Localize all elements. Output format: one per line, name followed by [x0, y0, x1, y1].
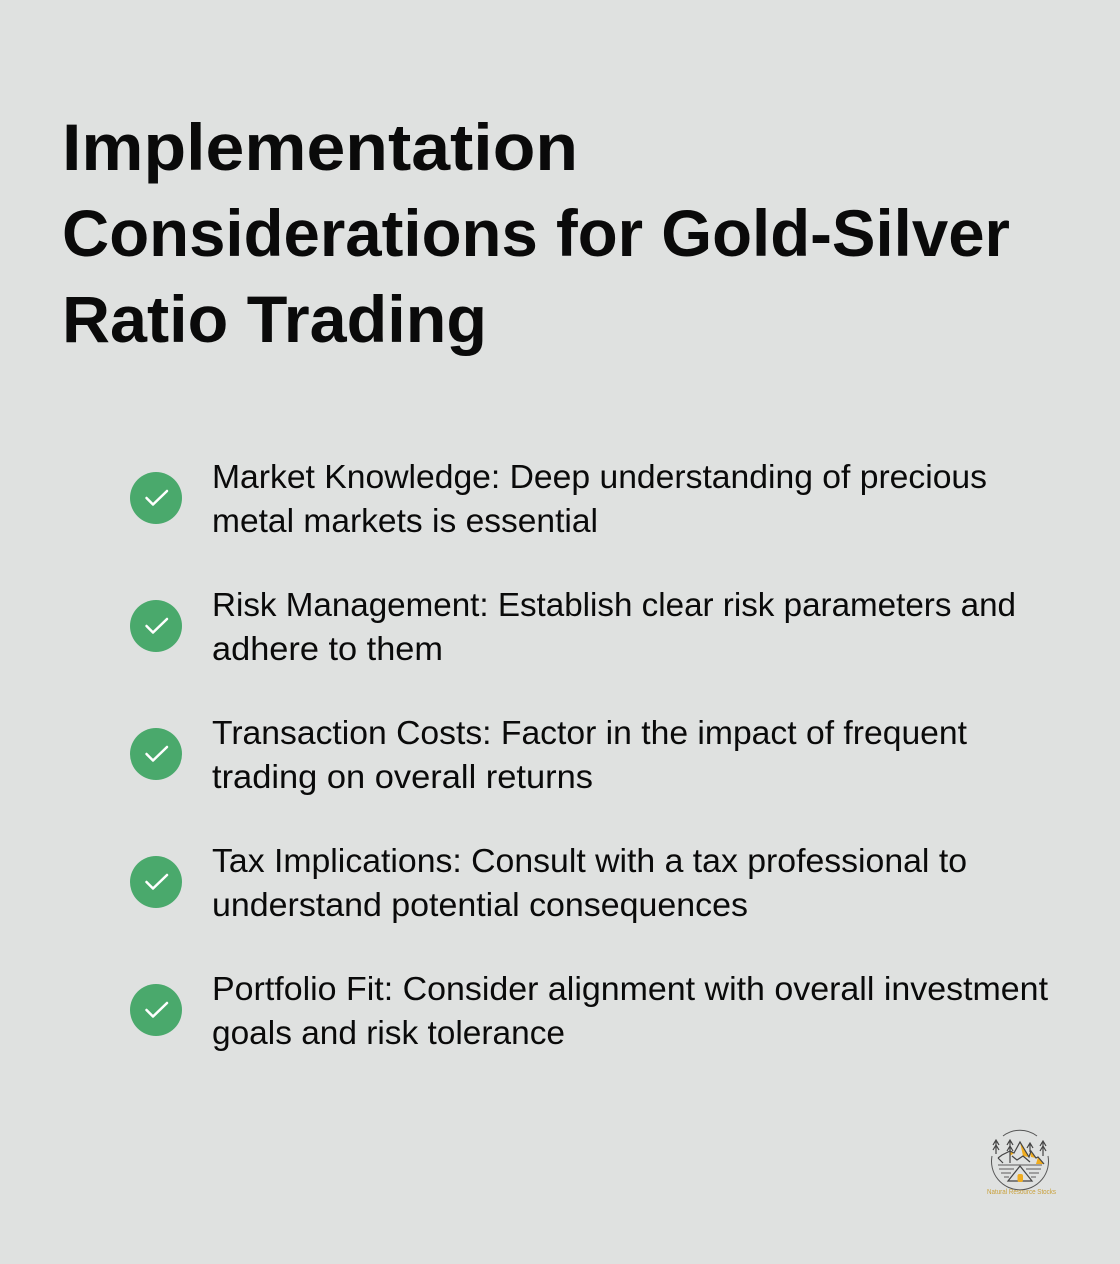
icon: check	[130, 472, 182, 524]
text: market knowledge	[212, 458, 987, 539]
logo mountains	[998, 1142, 1044, 1164]
text: portfolio fit: goals and risk tolerance	[212, 1014, 565, 1051]
text: market knowledge: metal markets is essential	[212, 502, 598, 539]
text: risk management	[212, 586, 1016, 667]
text: risk management: Risk Management: Establish clear risk parameters and	[212, 586, 1016, 623]
logo water and tent	[998, 1165, 1042, 1182]
logo caption: Natural Resource Stocks	[987, 1189, 1056, 1196]
text: transaction costs: trading on overall returns	[212, 758, 593, 795]
text: transaction costs	[212, 714, 967, 795]
text: transaction costs: Transaction Costs: Factor in the impact of frequent	[212, 714, 967, 751]
title: Ratio Trading	[62, 282, 487, 356]
item: market knowledge	[130, 458, 987, 539]
icon: check	[130, 984, 182, 1036]
title: Implementation	[62, 110, 578, 184]
text: portfolio fit	[212, 970, 1048, 1051]
checklist	[130, 458, 1048, 1051]
text: tax implications: Tax Implications: Consult with a tax professional to	[212, 842, 967, 879]
logo ring	[992, 1130, 1048, 1190]
text: tax implications: understand potential consequences	[212, 886, 748, 923]
icon: check	[130, 856, 182, 908]
text: risk management: adhere to them	[212, 630, 443, 667]
text: market knowledge: Market Knowledge: Deep understanding of precious	[212, 458, 987, 495]
text: portfolio fit: Portfolio Fit: Consider alignment with overall investment	[212, 970, 1048, 1007]
text: tax implications	[212, 842, 967, 923]
item: transaction costs	[130, 714, 967, 795]
item: risk management	[130, 586, 1016, 667]
icon: check	[130, 728, 182, 780]
item: portfolio fit	[130, 970, 1048, 1051]
title	[62, 110, 1010, 356]
icon: check	[130, 600, 182, 652]
logo: natural resource stocks	[987, 1130, 1056, 1196]
title: Considerations for Gold-Silver	[62, 196, 1010, 270]
logo trees	[993, 1140, 1046, 1163]
item: tax implications	[130, 842, 967, 923]
